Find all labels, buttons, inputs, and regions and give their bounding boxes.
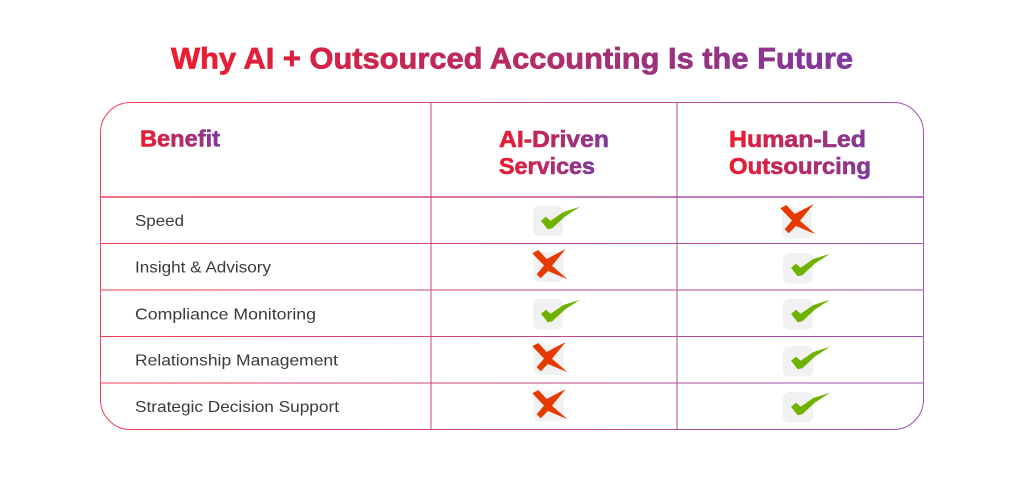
row label: Insight & Advisory: Insight & Advisory	[135, 260, 271, 276]
row label: Compliance Monitoring: Compliance Monitoring	[135, 306, 316, 324]
column heading: Benefit: Benefit	[140, 126, 220, 152]
icon: check, Insight, Human	[783, 253, 830, 284]
icon: cross, Relationship, AI	[532, 342, 568, 375]
icon: check, Compliance, Human	[783, 299, 830, 330]
column heading: Human-Led Outsourcing: Human-Led	[729, 126, 866, 152]
table grid	[100, 102, 924, 430]
icon: check, Speed, AI	[533, 206, 580, 236]
row label: Speed: Speed	[135, 213, 184, 230]
icon: cross, Strategic, AI	[532, 389, 568, 422]
icon: cross, Insight, AI	[532, 249, 568, 282]
icon: cross, Speed, Human	[780, 204, 816, 238]
column heading: AI-Driven Services	[499, 126, 609, 179]
column heading: Human-Led Outsourcing: Outsourcing	[729, 153, 871, 179]
column heading: AI-Driven Services: AI-Driven	[499, 126, 609, 152]
icon: check, Strategic, Human	[783, 392, 830, 422]
title: Why AI + Outsourced Accounting Is the Future	[171, 42, 853, 76]
row label: Strategic Decision Support: Strategic Decision Support	[135, 399, 340, 416]
icon: check, Relationship, Human	[783, 346, 830, 376]
comparison table	[100, 102, 924, 430]
row label: Relationship Management: Relationship Management	[135, 352, 339, 370]
icon: check, Compliance, AI	[533, 299, 580, 330]
column heading: Human-Led Outsourcing	[729, 126, 871, 179]
column heading: AI-Driven Services: Services	[499, 153, 595, 179]
